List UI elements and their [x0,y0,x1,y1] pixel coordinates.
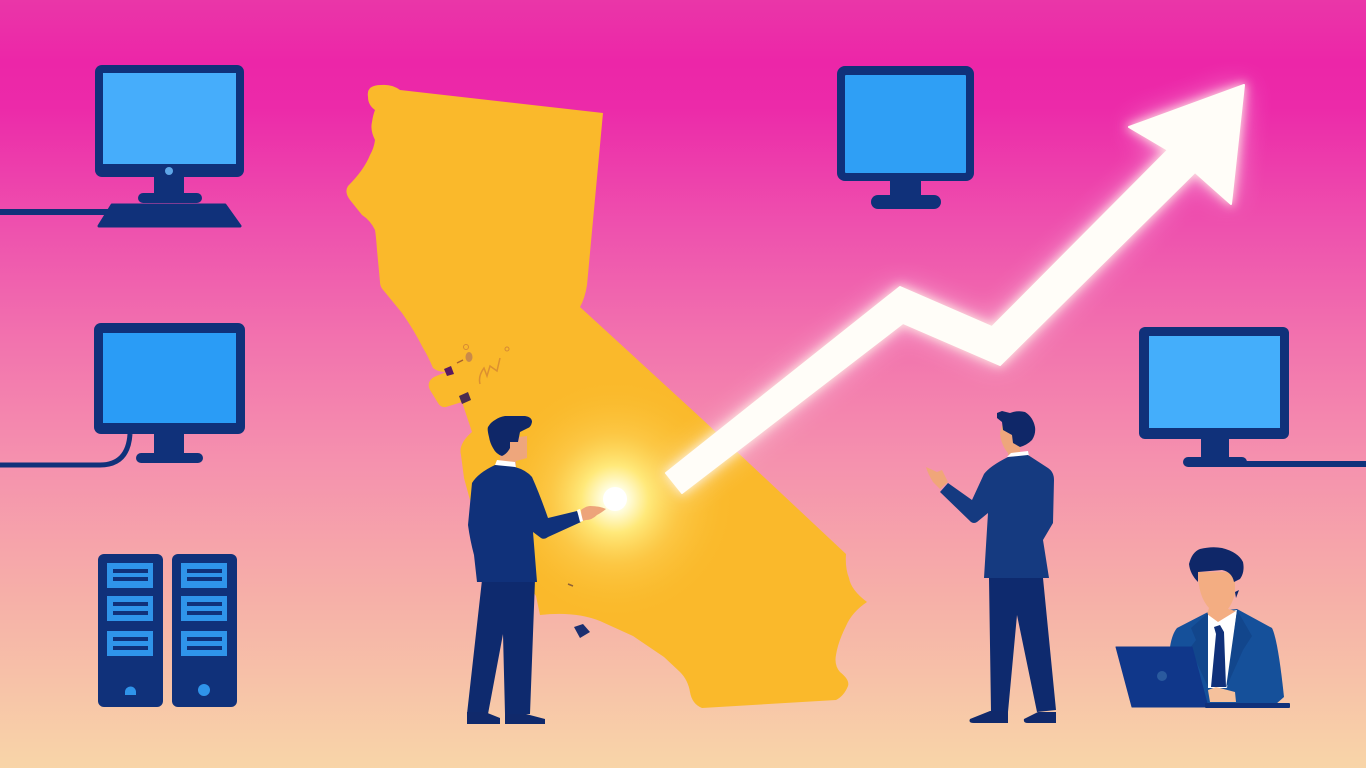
seated man with laptop [1116,547,1290,708]
glowing point [603,487,627,511]
glowing growth arrow [666,85,1244,493]
jacket and arm [940,455,1054,578]
California map [346,85,867,708]
shoes [970,711,1056,723]
hair [488,416,532,456]
map marks near the south coast [568,584,590,638]
hand [1208,687,1236,702]
server racks [98,554,237,707]
cuff [577,509,583,522]
hand [926,467,948,489]
hand [581,506,606,521]
trousers [989,578,1056,712]
map marks near the bay [444,344,509,404]
tie [1211,625,1226,687]
collar [495,460,516,468]
collar [1007,451,1029,457]
hair [997,411,1035,447]
desk [1205,703,1290,708]
ear mark [1235,590,1239,598]
colleague gesturing [926,411,1056,723]
laptop [1116,647,1208,707]
monitor, top centre [837,66,974,209]
neck and face [1198,572,1236,622]
shirt [1207,610,1237,688]
presenter at the map [467,416,606,724]
shoes [467,712,545,724]
monitor with keyboard, top left [0,65,244,226]
jacket and arm [468,465,581,582]
monitor with cable, middle left [0,323,245,465]
monitor with cable, right [1139,327,1366,467]
jacket [1170,609,1284,704]
head [1000,425,1020,455]
hair [1189,547,1244,582]
head [500,436,527,466]
lapels [1190,610,1252,688]
glow spot on map [530,410,704,588]
trousers [467,580,535,714]
